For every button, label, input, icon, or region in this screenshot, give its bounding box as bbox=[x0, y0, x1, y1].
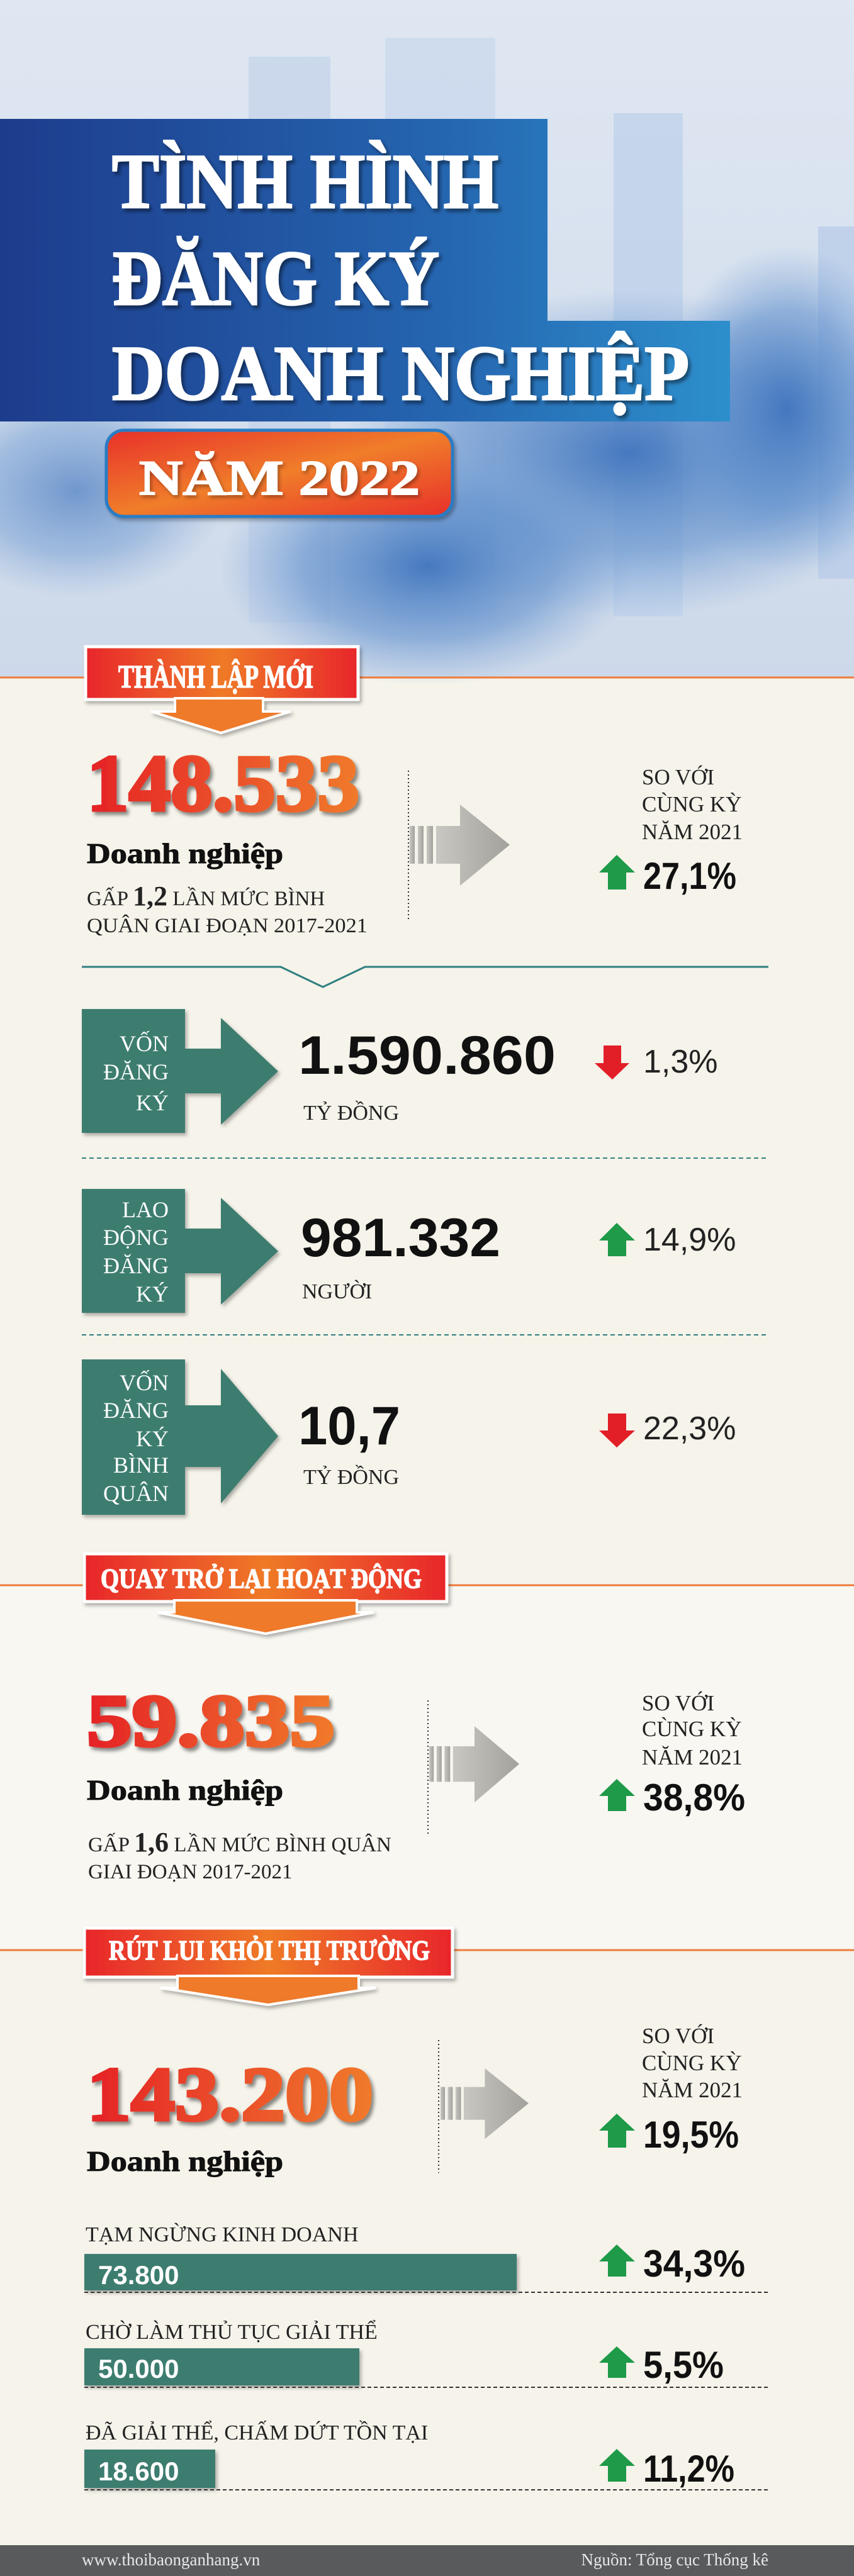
big number 148.533: QUÂN GIAI ĐOẠN 2017-2021 bbox=[87, 914, 368, 937]
comparison 3: CÙNG KỲ bbox=[642, 2050, 741, 2075]
tag: thanh lap moi: THÀNH LẬP MỚI bbox=[118, 659, 313, 695]
big number 59.835: 59.835 bbox=[87, 1680, 335, 1762]
big number 148.533: 148.533 bbox=[87, 739, 359, 828]
row: lao dong dang ky: LAO bbox=[122, 1197, 169, 1222]
row: von dang ky binh quan: TỶ ĐỒNG bbox=[303, 1464, 399, 1489]
comparison 3: NĂM 2021 bbox=[642, 2078, 743, 2102]
title text: ĐĂNG KÝ bbox=[112, 235, 439, 321]
row: von dang ky binh quan: 22,3% bbox=[643, 1410, 736, 1447]
tag: rut lui khoi thi truong bbox=[84, 1928, 452, 2005]
big number 143.200: 143.200 bbox=[87, 2052, 373, 2137]
footer: www.thoibaonganhang.vn bbox=[82, 2550, 261, 2569]
row: von dang ky: KÝ bbox=[136, 1090, 169, 1115]
row: lao dong dang ky: 14,9% bbox=[643, 1222, 736, 1258]
row: von dang ky: 1,3% bbox=[643, 1044, 718, 1080]
row: von dang ky: ĐĂNG bbox=[103, 1059, 169, 1084]
row: lao dong dang ky: NGƯỜI bbox=[302, 1280, 372, 1303]
row: lao dong dang ky: ĐĂNG bbox=[103, 1253, 169, 1278]
title text: TÌNH HÌNH bbox=[112, 138, 498, 225]
row: von dang ky: 1.590.860 bbox=[298, 1025, 556, 1086]
comparison 1: NĂM 2021 bbox=[642, 820, 743, 844]
row: lao dong dang ky: KÝ bbox=[136, 1281, 169, 1307]
big number 59.835: GIAI ĐOẠN 2017-2021 bbox=[88, 1861, 292, 1883]
tag: rut lui khoi thi truong: RÚT LUI KHỎI THỊ TRƯỜNG bbox=[109, 1935, 430, 1966]
dotted divider & gray arrow 3 bbox=[439, 2040, 529, 2173]
big number 59.835: GẤP 1,6 LẦN MỨC BÌNH QUÂN bbox=[88, 1827, 391, 1858]
row: lao dong dang ky: 981.332 bbox=[301, 1208, 500, 1268]
bar: tam ngung kinh doanh bbox=[84, 2222, 768, 2292]
big number 143.200: Doanh nghiệp bbox=[87, 2145, 283, 2177]
dotted divider & gray arrow 1 bbox=[408, 771, 510, 920]
comparison 3: 19,5% bbox=[643, 2114, 739, 2156]
comparison 2 bbox=[599, 1690, 745, 1819]
row: von dang ky binh quan: KÝ bbox=[136, 1426, 169, 1451]
row: von dang ky binh quan: 10,7 bbox=[298, 1396, 400, 1456]
bar: tam ngung kinh doanh: 73.800 bbox=[98, 2260, 179, 2290]
row: von dang ky binh quan: VỐN bbox=[120, 1369, 169, 1395]
row: von dang ky binh quan: BÌNH bbox=[113, 1452, 169, 1478]
comparison 1: CÙNG KỲ bbox=[642, 791, 741, 817]
bar: cho lam thu tuc giai the: CHỜ LÀM THỦ TỤC GIẢI THỂ bbox=[86, 2320, 378, 2344]
tag: thanh lap moi bbox=[86, 647, 358, 733]
big number 59.835 bbox=[87, 1680, 391, 1883]
comparison 1 bbox=[599, 764, 743, 897]
teal notch line bbox=[82, 967, 768, 987]
bar: tam ngung kinh doanh: 34,3% bbox=[643, 2243, 745, 2285]
section 2 background bbox=[0, 1585, 854, 1950]
big number 148.533: Doanh nghiệp bbox=[87, 837, 283, 869]
comparison 1: 27,1% bbox=[643, 855, 736, 897]
header background bbox=[0, 0, 854, 686]
year pill: NĂM 2022 bbox=[139, 450, 420, 505]
comparison 3: SO VỚI bbox=[642, 2023, 714, 2048]
big number 59.835: Doanh nghiệp bbox=[87, 1774, 283, 1806]
bar: da giai the bbox=[84, 2420, 768, 2490]
title text: DOANH NGHIỆP bbox=[112, 330, 689, 416]
big number 148.533 bbox=[87, 739, 368, 937]
row: lao dong dang ky: ĐỘNG bbox=[103, 1225, 169, 1250]
bar: tam ngung kinh doanh: TẠM NGỪNG KINH DOANH bbox=[86, 2222, 358, 2246]
title band bbox=[0, 119, 730, 421]
comparison 1: SO VỚI bbox=[642, 764, 714, 789]
big number 148.533: GẤP 1,2 LẦN MỨC BÌNH bbox=[87, 881, 325, 912]
bar: da giai the: 11,2% bbox=[643, 2448, 734, 2490]
comparison 2: NĂM 2021 bbox=[642, 1745, 743, 1770]
big number 143.200 bbox=[87, 2052, 373, 2177]
row: von dang ky binh quan: ĐĂNG bbox=[103, 1398, 169, 1423]
bar: cho lam thu tuc giai the: 5,5% bbox=[643, 2344, 724, 2386]
row: von dang ky: VỐN bbox=[120, 1030, 169, 1056]
dotted divider & gray arrow 2 bbox=[428, 1700, 519, 1835]
tag: quay tro lai hoat dong: QUAY TRỞ LẠI HOẠT ĐỘNG bbox=[101, 1563, 422, 1594]
comparison 3 bbox=[599, 2023, 743, 2156]
footer bbox=[0, 2545, 854, 2576]
comparison 2: SO VỚI bbox=[642, 1690, 714, 1715]
row: von dang ky binh quan: QUÂN bbox=[103, 1481, 169, 1506]
footer: Nguồn: Tổng cục Thống kê bbox=[582, 2550, 768, 2569]
tag: quay tro lai hoat dong bbox=[84, 1554, 447, 1634]
bar: da giai the: ĐÃ GIẢI THỂ, CHẤM DỨT TỒN TẠI bbox=[86, 2420, 428, 2445]
row: von dang ky binh quan bbox=[82, 1359, 736, 1515]
row: von dang ky bbox=[82, 1009, 718, 1133]
bar: cho lam thu tuc giai the bbox=[84, 2320, 768, 2387]
year pill bbox=[106, 430, 452, 516]
comparison 2: 38,8% bbox=[643, 1776, 745, 1819]
bar: da giai the: 18.600 bbox=[98, 2456, 179, 2486]
orange divider lines bbox=[0, 677, 854, 1950]
comparison 2: CÙNG KỲ bbox=[642, 1716, 741, 1741]
row: lao dong dang ky bbox=[82, 1189, 736, 1313]
row: von dang ky: TỶ ĐỒNG bbox=[303, 1100, 399, 1125]
title text bbox=[112, 138, 689, 416]
bar: cho lam thu tuc giai the: 50.000 bbox=[98, 2354, 179, 2384]
